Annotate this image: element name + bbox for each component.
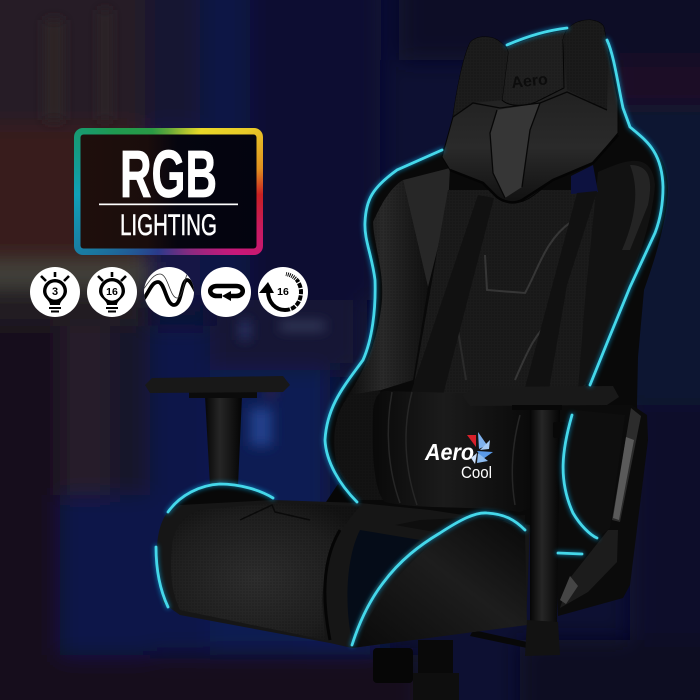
icon: 16 step cycle <box>258 267 308 317</box>
right armrest and post <box>462 386 619 656</box>
RGB lighting badge <box>74 128 263 255</box>
small black seat joint <box>326 484 360 504</box>
icon: 16 colour bulb <box>87 267 137 317</box>
AeroCool logo: Cool <box>461 463 492 482</box>
icon: 16 step cycle: 16 <box>277 286 289 298</box>
shoulder straps <box>410 191 597 395</box>
headrest pillow <box>442 20 618 202</box>
seat cushion <box>157 500 530 648</box>
icon: 3 colour bulb <box>30 267 80 317</box>
cyan LED edge lines <box>156 28 663 645</box>
right side mechanism <box>556 405 648 616</box>
icon: 3 colour bulb: 3 <box>52 286 58 298</box>
cyan LED glow <box>156 28 663 645</box>
seat back cushion hoop <box>168 484 273 512</box>
embossed logo on backrest: Aero <box>511 71 549 92</box>
base and gas lift <box>373 630 527 700</box>
icon: 16 colour bulb: 16 <box>106 286 118 298</box>
left armrest <box>145 376 290 486</box>
feature icons row <box>30 267 308 317</box>
badge panel with text <box>80 134 256 248</box>
AeroCool logo <box>424 432 493 482</box>
back shell silhouette <box>325 28 668 540</box>
seat gap showing background <box>571 165 598 194</box>
lumbar pillow <box>373 391 530 512</box>
badge panel with text: LIGHTING <box>120 209 217 242</box>
AeroCool logo: Aero <box>424 439 474 465</box>
icon: breathing wave <box>143 267 197 317</box>
icon: loop arrow <box>201 267 251 317</box>
back stitching <box>458 222 571 380</box>
